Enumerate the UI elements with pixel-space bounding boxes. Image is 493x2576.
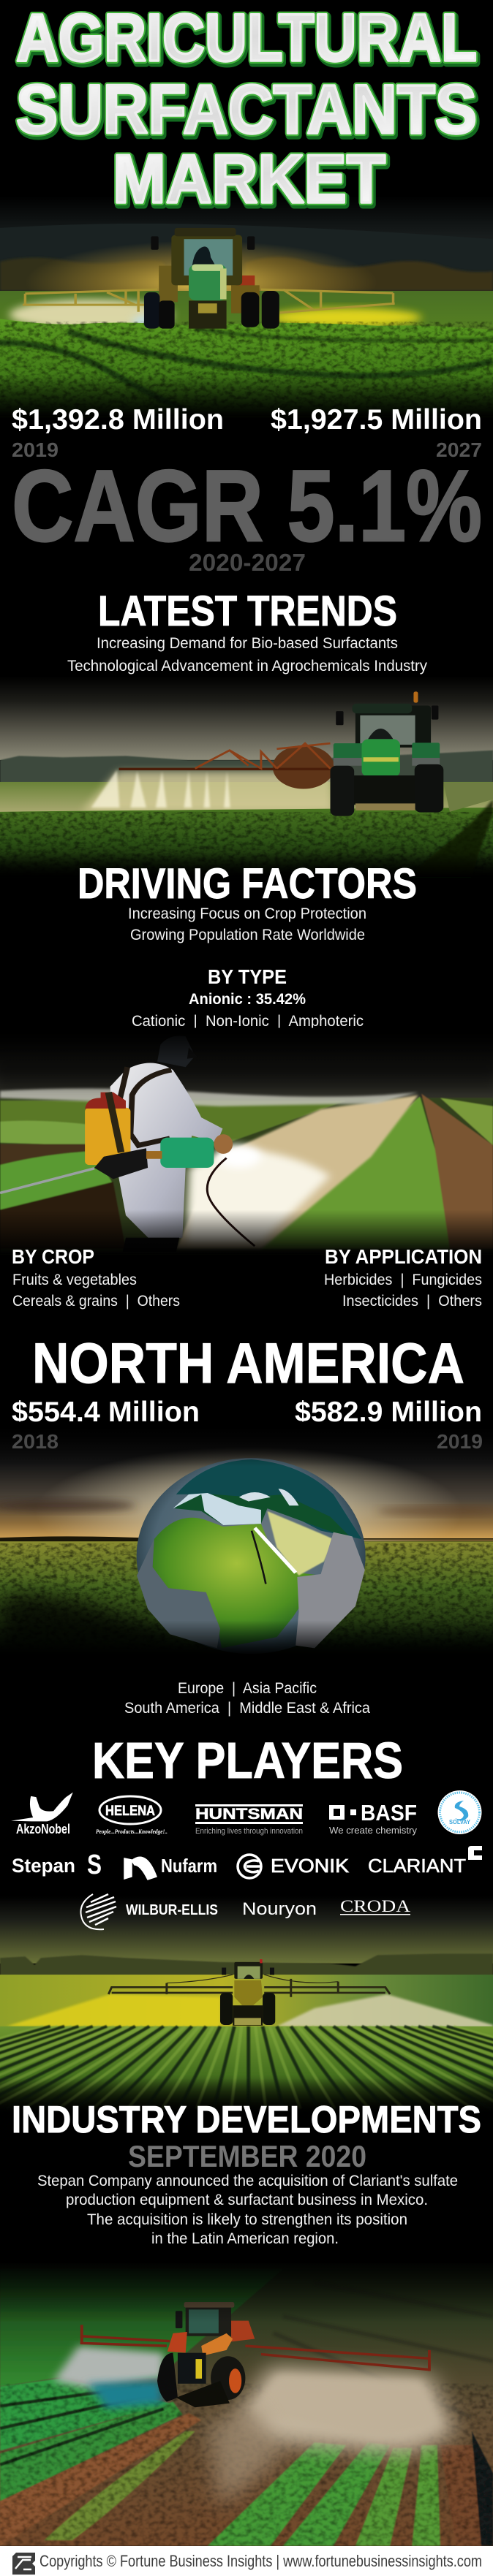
description line 3: The acquisition is likely to strengthen its position xyxy=(87,2211,407,2228)
market size 2019 value: $1,392.8 Million xyxy=(12,404,224,436)
year 2019 regional: 2019 xyxy=(437,1430,483,1453)
spray mist xyxy=(53,2346,456,2507)
key player logos xyxy=(11,1790,482,1929)
scene: red tractor spraying mist over rows xyxy=(0,2258,493,2546)
title line: MARKET: MARKET xyxy=(113,140,385,217)
leading type share: Anionic : 35.42% xyxy=(189,991,306,1008)
logo: Helena xyxy=(96,1796,168,1835)
logo: Wilbur-Ellis xyxy=(80,1894,218,1929)
crop list line 2: Cereals & grains | Others xyxy=(12,1293,180,1310)
logo: Wilbur-Ellis: WILBUR-ELLIS xyxy=(126,1902,218,1918)
green tractor xyxy=(331,691,443,816)
logo: Huntsman: Enriching lives through innovation xyxy=(195,1827,303,1836)
logo: BASF: We create chemistry xyxy=(329,1825,417,1836)
logo: Croda: CRODA xyxy=(340,1897,410,1915)
heading: by crop: BY CROP xyxy=(12,1245,94,1268)
scene: yellow tractor with wide boom xyxy=(0,1896,493,2159)
logo: Huntsman: HUNTSMAN xyxy=(195,1806,303,1823)
logo: Helena: HELENA xyxy=(105,1804,155,1819)
development date: SEPTEMBER 2020 xyxy=(128,2139,366,2173)
logo: Stepan: S xyxy=(87,1850,102,1880)
CAGR period: 2020-2027 xyxy=(189,549,306,576)
spray mist xyxy=(186,1147,331,1243)
dusk shading xyxy=(0,1056,493,1090)
logo: Stepan: Stepan xyxy=(12,1855,75,1877)
heading: by type: BY TYPE xyxy=(208,965,287,988)
heading: by application: BY APPLICATION xyxy=(325,1245,482,1268)
logo: Helena: People...Products...Knowledge!.. xyxy=(96,1828,168,1835)
logo: Stepan xyxy=(12,1850,102,1880)
soil furrows and crop rows xyxy=(0,2378,493,2546)
sprayer booms xyxy=(23,289,395,313)
trend 2: Technological Advancement in Agrochemicals Industry xyxy=(67,658,427,675)
description line 4: in the Latin American region. xyxy=(151,2230,339,2247)
logo: Nufarm: Nufarm xyxy=(161,1855,217,1877)
heading: key players: KEY PLAYERS xyxy=(92,1732,403,1789)
market size 2027 value: $1,927.5 Million xyxy=(271,404,482,436)
development description xyxy=(37,2173,458,2247)
logo: Huntsman xyxy=(195,1804,303,1836)
trend 1: Increasing Demand for Bio-based Surfactants xyxy=(97,635,398,652)
year 2019: 2019 xyxy=(12,438,59,461)
footer bar xyxy=(0,2546,493,2576)
year 2018: 2018 xyxy=(12,1430,59,1453)
worker figure xyxy=(0,1036,233,1252)
logo: Solvay xyxy=(437,1790,481,1834)
logo: Nouryon: Nouryon xyxy=(242,1899,317,1919)
logo: Clariant: CLARIANT xyxy=(368,1855,466,1877)
other regions line 2: South America | Middle East & Africa xyxy=(124,1700,370,1717)
yellow tractor xyxy=(220,1959,275,2026)
other regions line 1: Europe | Asia Pacific xyxy=(178,1680,317,1697)
description line 2: production equipment & surfactant business in Mexico. xyxy=(66,2192,428,2208)
hose xyxy=(207,1158,255,1246)
sprayer boom xyxy=(108,1975,390,1997)
application list line 2: Insecticides | Others xyxy=(342,1293,482,1310)
regional value 2018: $554.4 Million xyxy=(12,1397,200,1428)
driver 1: Increasing Focus on Crop Protection xyxy=(128,905,366,922)
scene: tractor spraying crop field xyxy=(0,196,493,438)
title line: MARKET: MARKET xyxy=(114,143,387,219)
crop rows xyxy=(0,2026,493,2109)
field rows xyxy=(0,1094,493,1255)
globe xyxy=(137,1458,366,1654)
title xyxy=(16,1,478,219)
heading: driving factors: DRIVING FACTORS xyxy=(78,860,417,908)
title line: MARKET: MARKET xyxy=(113,140,385,217)
logo: Evonik: EVONIK xyxy=(271,1855,350,1877)
scene: tractor with side sprayer xyxy=(0,676,493,877)
heading: latest trends: LATEST TRENDS xyxy=(98,588,397,635)
logo: Evonik xyxy=(238,1855,350,1878)
logo: AkzoNobel: AkzoNobel xyxy=(16,1822,70,1836)
application list line 1: Herbicides | Fungicides xyxy=(324,1272,482,1288)
tractor body xyxy=(144,228,279,329)
logo: Solvay: SOLVAY xyxy=(449,1819,471,1825)
logo: Nufarm xyxy=(124,1855,217,1880)
icon: Fortune Business Insights logo xyxy=(12,2553,35,2575)
boom xyxy=(80,2325,429,2371)
orange tractor xyxy=(157,2302,255,2407)
year 2027: 2027 xyxy=(436,438,482,461)
scene: globe over grass field xyxy=(0,1421,493,1679)
logo: BASF: BASF xyxy=(361,1800,417,1825)
description line 1: Stepan Company announced the acquisition of Clariant's sulfate xyxy=(37,2173,458,2189)
driver 2: Growing Population Rate Worldwide xyxy=(130,927,365,943)
regional value 2019: $582.9 Million xyxy=(295,1397,482,1428)
sprayer boom and tank xyxy=(119,743,334,789)
logo: BASF xyxy=(329,1800,417,1836)
logo: AkzoNobel xyxy=(11,1793,73,1836)
logo: Clariant xyxy=(368,1846,482,1877)
crop list line 1: Fruits & vegetables xyxy=(12,1272,137,1288)
scene: worker with backpack sprayer xyxy=(0,1028,493,1315)
other types: Cationic | Non-Ionic | Amphoteric xyxy=(132,1013,364,1030)
